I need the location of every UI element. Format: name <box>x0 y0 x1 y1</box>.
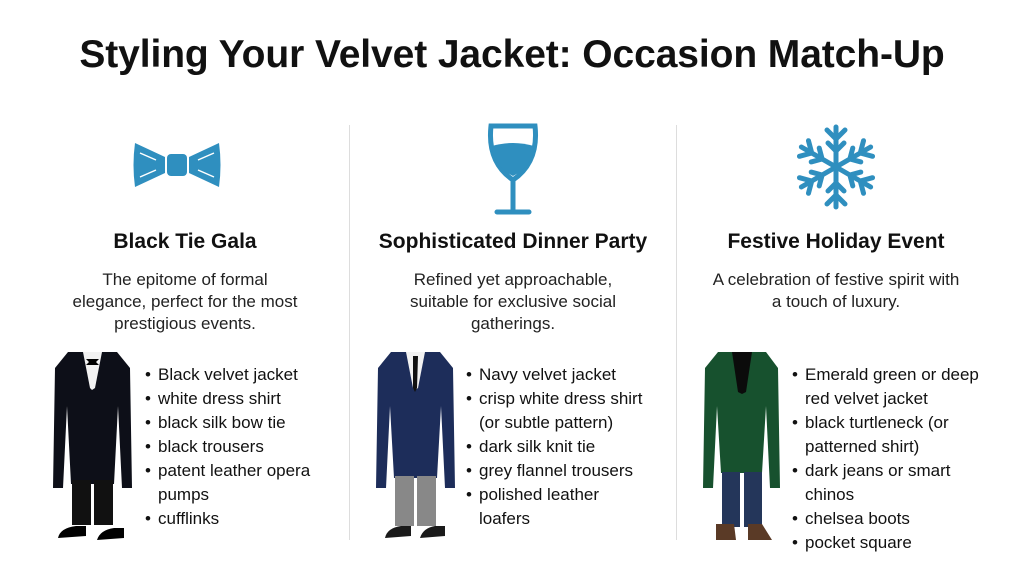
panel: festive holiday event <box>703 124 979 552</box>
heading: Sophisticated Dinner Party <box>379 230 647 253</box>
heading: Festive Holiday Event <box>727 230 945 253</box>
bullet list: patent leather opera pumps <box>158 461 310 504</box>
bullet list: black turtleneck (or patterned shirt) <box>805 413 949 456</box>
bullet list: Emerald green or deep red velvet jacket <box>805 365 979 408</box>
panel: dinner party <box>376 124 647 538</box>
bullet list <box>146 365 310 528</box>
icon: wine glass <box>488 124 538 214</box>
description: A celebration of festive spirit with a touch of luxury. <box>713 270 959 311</box>
bullet list <box>792 365 979 552</box>
bullet list: black trousers <box>158 437 264 456</box>
bullet list: dark silk knit tie <box>479 437 595 456</box>
bullet list: cufflinks <box>158 509 219 528</box>
bullet list: black silk bow tie <box>158 413 286 432</box>
illustration: navy suit <box>376 352 455 538</box>
bullet list: Navy velvet jacket <box>479 365 616 384</box>
icon: bow tie <box>134 143 220 187</box>
title: Styling Your Velvet Jacket: Occasion Match-Up <box>79 33 945 76</box>
heading: Black Tie Gala <box>113 230 257 253</box>
icon: snowflake <box>797 124 875 210</box>
bullet list: grey flannel trousers <box>479 461 633 480</box>
bullet list: white dress shirt <box>158 389 281 408</box>
description: Refined yet approachable, suitable for exclusive social gatherings. <box>410 270 616 333</box>
bullet list: polished leather loafers <box>479 485 599 528</box>
panel: black tie gala <box>53 143 310 540</box>
bullet list: chelsea boots <box>805 509 910 528</box>
bullet list: dark jeans or smart chinos <box>805 461 950 504</box>
bullet list <box>466 365 642 528</box>
bullet list: pocket square <box>805 533 912 552</box>
illustration: tuxedo <box>53 352 132 540</box>
description: The epitome of formal elegance, perfect for the most prestigious events. <box>73 270 297 333</box>
bullet list: crisp white dress shirt (or subtle pattern) <box>479 389 642 432</box>
illustration: green jacket <box>703 352 780 540</box>
bullet list: Black velvet jacket <box>158 365 298 384</box>
